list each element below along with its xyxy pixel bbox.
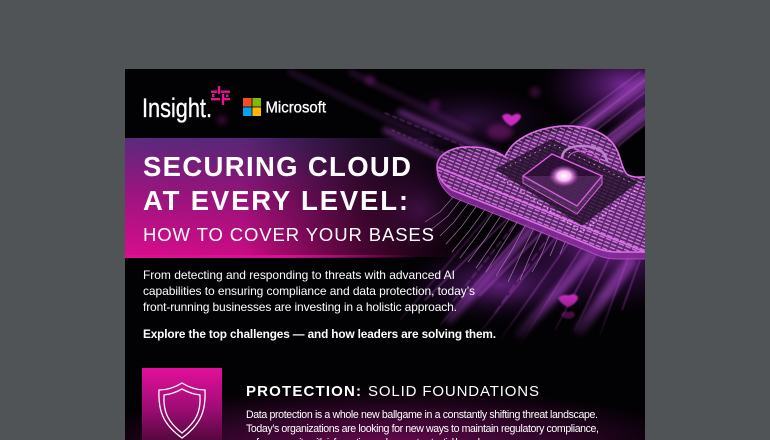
- protection body text: Data protection is a whole new ballgame in a constantly shifting threat landscape.: [246, 409, 598, 421]
- title: [144, 156, 434, 241]
- title: HOW TO COVER YOUR BASES: [143, 224, 434, 245]
- heading: protection: [247, 386, 538, 396]
- heading: protection: PROTECTION:: [246, 383, 361, 400]
- protection body text: [246, 409, 599, 440]
- background purple glow: [388, 69, 645, 318]
- circuit traces fanning to lower left: [425, 195, 566, 282]
- intro text: From detecting and responding to threats with advanced AI: [143, 268, 455, 282]
- floating purple heart shapes: [217, 75, 578, 319]
- panel: lower section glow: [125, 345, 645, 440]
- intro text: capabilities to ensuring compliance and data protection, today’s: [143, 284, 475, 298]
- cloud shape: [437, 126, 645, 259]
- logo: Microsoft: Microsoft: [266, 100, 327, 116]
- intro text: front-running businesses are investing in a holistic approach.: [143, 300, 457, 314]
- heading: protection: SOLID FOUNDATIONS: [368, 383, 539, 400]
- title: AT EVERY LEVEL:: [143, 185, 408, 216]
- light streaks behind cloud: [290, 72, 645, 345]
- infographic canvas: [125, 69, 645, 440]
- intro text: [143, 268, 475, 314]
- logo: Insight: Insight.: [142, 93, 212, 123]
- title band: [125, 138, 465, 258]
- padlock: [523, 146, 607, 214]
- title: SECURING CLOUD: [143, 151, 411, 182]
- icon: Insight hash mark: [211, 86, 230, 105]
- circuit chip: [495, 139, 638, 226]
- protection body text: Today’s organizations are looking for new ways to maintain regulatory compliance,: [246, 423, 599, 435]
- hero image: cloud security illustration: [215, 69, 645, 340]
- fade hero into dark lower section: [400, 297, 626, 345]
- icon: shield tile: [142, 368, 222, 440]
- panel: dark card background: [125, 69, 645, 340]
- call to action text: Explore the top challenges — and how leaders are solving them.: [143, 327, 496, 341]
- logo: Microsoft: [243, 98, 327, 116]
